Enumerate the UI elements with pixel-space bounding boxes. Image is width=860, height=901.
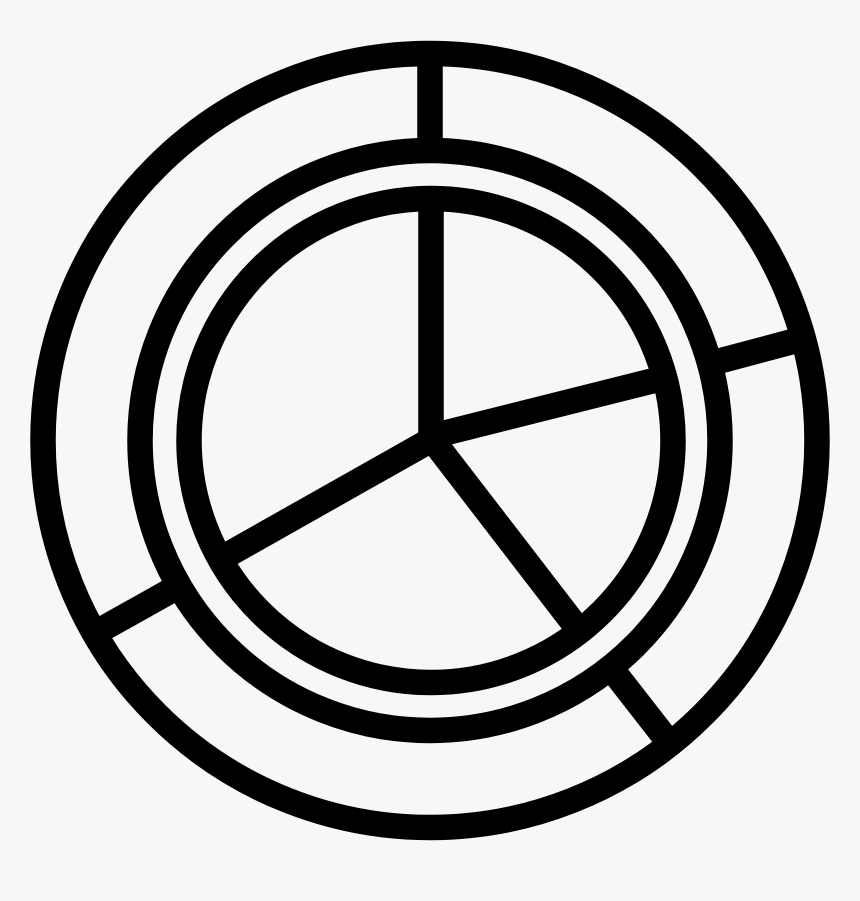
outer ring dividers xyxy=(97,60,802,749)
middle ring xyxy=(140,150,720,730)
inner pie circle xyxy=(189,198,673,682)
outer ring xyxy=(43,54,817,828)
pie slice dividers xyxy=(222,205,660,629)
